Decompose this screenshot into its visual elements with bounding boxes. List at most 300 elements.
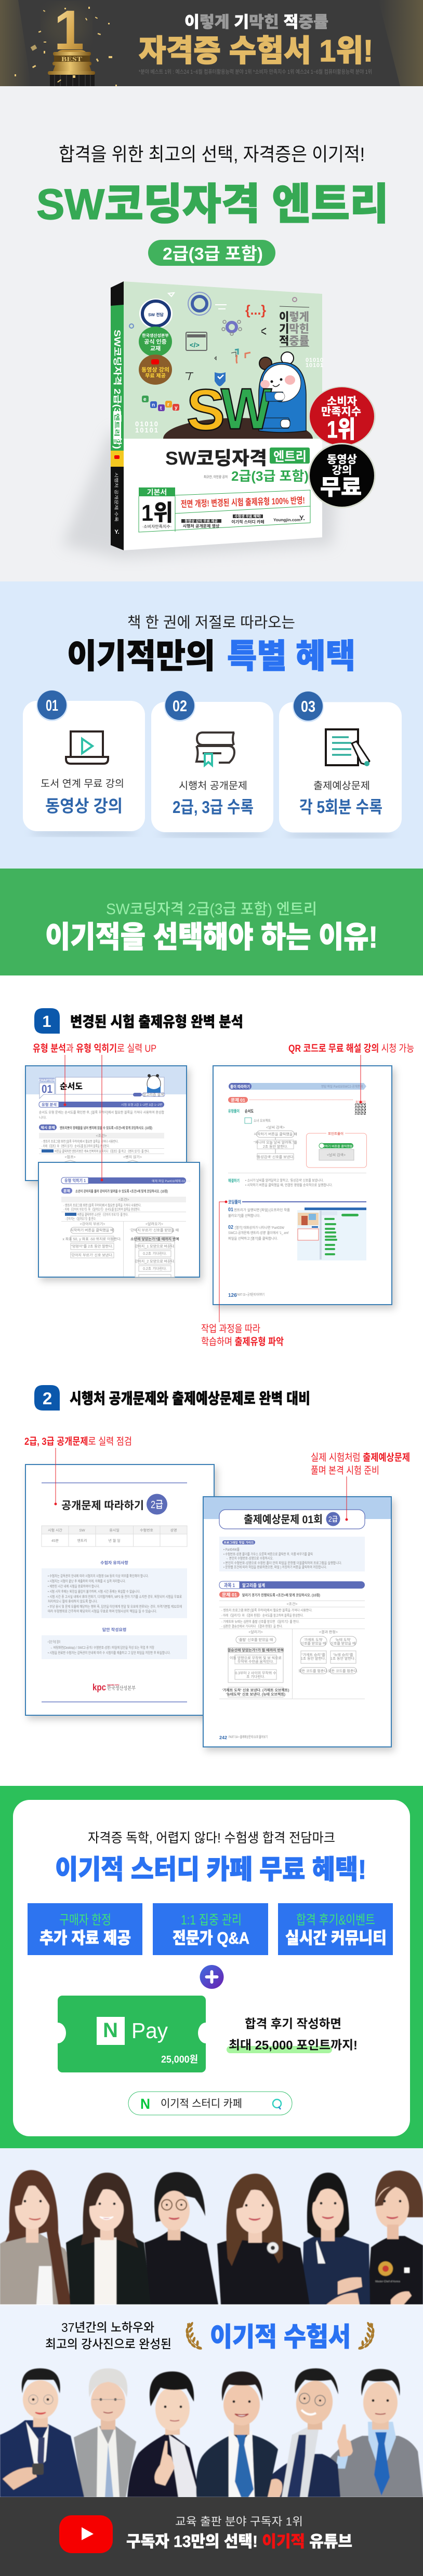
benefit: expert Q&A: 1:1 집중 관리 xyxy=(181,1912,242,1928)
sticker: consumer rank: 1위 xyxy=(327,416,355,443)
page sample: solution with QR: 2초 동안 말한다. xyxy=(263,1145,288,1149)
cover icons: t xyxy=(160,405,162,411)
page sample: type practice: '강아지 부르기' 신호를 받았을 때 xyxy=(130,1228,179,1232)
page sample: expected exam 01: '가제트 도착' xyxy=(304,1638,323,1642)
page sample: type practice: 소년에 닿았는가?를 때까지 반복 xyxy=(130,1237,179,1241)
lower instructors background xyxy=(0,2305,423,2497)
intro subtitle: 합격을 위한 최고의 선택, 자격증은 이기적! xyxy=(59,144,365,165)
page sample: type practice: '강아지 부르기' 신호 보낸다. xyxy=(71,1253,113,1257)
cover info box xyxy=(139,487,310,532)
cover info box: 1위 xyxy=(141,500,173,526)
callout: follow workflow xyxy=(201,1323,284,1348)
page sample: type practice: - 엔트리 프로그램 화면 [블록 꾸러미]에서 필요한 블록을 가져다 사용한다. xyxy=(63,1203,141,1208)
why subtitle: SW코딩자격 2급(3급 포함) 엔트리 xyxy=(106,901,317,918)
benefit: expert Q&A xyxy=(153,1903,268,1955)
cover mascot xyxy=(124,352,322,462)
page sample: public exam: → 바탕화면(Desktop) / SWC2-공개 / 수험번호-성명 / 파일에 답안을 작성 또는 작업 후 저장 xyxy=(50,1646,154,1650)
icon: plus xyxy=(200,1965,223,1989)
photo: male instructors xyxy=(0,2368,423,2497)
cafe title: 이기적 스터디 카페 무료 혜택! xyxy=(55,1855,366,1885)
section 1 heading: 변경된 시험 출제유형 완벽 분석 xyxy=(70,1014,243,1031)
panel: special benefits xyxy=(0,581,423,869)
page sample: expected exam 01: 과목 1 xyxy=(224,1582,235,1589)
laurel left xyxy=(186,2322,202,2350)
page sample: type practice: <강아지 부르기> xyxy=(80,1222,105,1226)
sticker: consumer rank xyxy=(308,386,376,446)
benefits subtitle: 책 한 권에 저절로 따라오는 xyxy=(127,614,295,631)
page sample: public exam: 따라 부정행위로 간주하여 해당자의 시험을 무효로 하며 민형사상의 책임을 질 수 있습니다. xyxy=(48,1609,157,1614)
benefit: extra materials: 추가 자료 제공 xyxy=(39,1929,131,1947)
page sample: solution with QR: 순서도 xyxy=(245,1109,254,1114)
page sample: expected exam 01: 2급 xyxy=(328,1515,338,1523)
sticker: consumer rank: 소비자 xyxy=(327,396,357,408)
callout: follow workflow: 학습하며 출제유형 파악 xyxy=(201,1336,284,1348)
page sample: expected exam 01: "가제트 승리"를 xyxy=(301,1653,325,1657)
table: exam info: 응시일 xyxy=(109,1528,120,1533)
search bar xyxy=(128,2092,292,2115)
banner main title: 자격증 수험서 1위! xyxy=(139,34,373,68)
page sample: expected exam 01: - 아래 《달리기》와 《결과 판정》 순서도를 참고하여 블록을 완성한다. xyxy=(221,1614,303,1618)
table: exam info: 수험번호 xyxy=(140,1528,153,1533)
page sample: expected exam 01: 무작위 수만큼 움직인다. xyxy=(237,1660,274,1664)
cover icons: </> xyxy=(190,341,200,349)
search bar: N xyxy=(140,2096,150,2112)
book cover xyxy=(124,281,323,550)
page sample: expected exam 01: 모든 코드를 멈춘다. xyxy=(298,1669,328,1673)
page sample: expected exam 01: 0.3부터 2 사이의 무작위 수 xyxy=(235,1671,276,1675)
top banner xyxy=(0,0,423,86)
page sample: public exam: 수험자 유의사항 xyxy=(100,1561,129,1565)
page sample: expected exam 01: 신호를 받았을 때 xyxy=(301,1642,326,1646)
page sample: chapter opener: 유형 분석 xyxy=(42,1103,57,1107)
page sample: public exam: • 수험자는 감독관의 안내에 따라 시험지의 시험명 SW 등의 이상 여부를 확인해야 합니다. xyxy=(48,1574,149,1578)
instructor 1 xyxy=(0,2170,91,2304)
cafe subtitle: 자격증 독학, 어렵지 않다! 수험생 합격 전담마크 xyxy=(88,1830,335,1846)
page sample: expected exam 01: • 문항별 조건에 따라 작업을 완료하였으면, 파일 ) 저장하기 버튼을 클릭하여 저장합니다. xyxy=(223,1565,327,1569)
sticker: free video xyxy=(308,443,376,508)
cover badges: 공식 인증 xyxy=(144,338,167,345)
why title: 이기적을 선택해야 하는 이유! xyxy=(45,920,378,954)
cover badges: 무료 제공 xyxy=(145,373,166,379)
page sample: solution with QR: 유형풀이 xyxy=(228,1109,240,1114)
callout: type analysis: 유형 분석과 유형 익히기로 실력 UP xyxy=(33,1043,156,1054)
instructor 6: Master Chef of Korea xyxy=(375,2280,400,2283)
icon: laptop play xyxy=(66,731,108,764)
page sample: solution with QR: 엔트리가 실행되면 [파일]-[오프라인 작품 xyxy=(234,1208,290,1212)
cover mascot: W xyxy=(221,376,272,441)
benefits title xyxy=(67,638,355,675)
page sample: type practice: 0.2초 기다린다. xyxy=(143,1267,167,1271)
cover info box: 수험생 무료 혜택! xyxy=(234,514,261,519)
cover title: 엔트리 xyxy=(273,450,307,464)
cover info box: Y. xyxy=(299,514,305,522)
icon: gold trophy xyxy=(15,0,117,86)
icon: document with pencil xyxy=(326,729,369,766)
page sample: public exam: • 시험지는 시험이 끝난 후 제출하여 이에, 이해를 시 실격 처리합니다. xyxy=(48,1579,126,1583)
page sample: expected exam 01: 1초 동안 말한다. xyxy=(331,1657,355,1661)
cover icons: r xyxy=(167,402,169,408)
instructor man 3 xyxy=(127,2371,200,2497)
benefit: extra materials xyxy=(28,1903,142,1955)
card 01: video lecture: 01 xyxy=(46,697,58,714)
card 02: public exam questions xyxy=(151,690,273,837)
instructor man 5 xyxy=(257,2368,340,2497)
book spine: Y. xyxy=(114,529,120,535)
page sample: expected exam 01: PART 04 • 출제예상문제 01회 풀어보기 xyxy=(229,1735,268,1739)
QR code xyxy=(355,1103,366,1115)
page sample: expected exam 01: 출제예상문제 01회 xyxy=(244,1514,323,1526)
banner footnote: *분야 베스트 1위 : 예스24 1~6월 컴퓨터활용능력 분야 1위 *소비자 만족지수 1위 예스24 1~6월 컴퓨터활용능력 분야 1위 xyxy=(139,69,372,75)
cover icons: e xyxy=(143,397,147,402)
instructor 6 xyxy=(367,2171,423,2304)
page sample: expected exam 01: - 엔트리 프로그램 화면 [블록 꾸러미]에서 필요한 블록을 가져다 사용한다. xyxy=(221,1608,312,1612)
cover icons: {...} xyxy=(245,302,266,318)
page sample: solution with QR: "자나야 오늘 날씨 알려줘."를 xyxy=(254,1141,297,1145)
page sample: solution with QR: 시작하기 버튼을 클릭했을 때 xyxy=(254,1132,297,1136)
step badge 1: 1 xyxy=(42,1012,51,1031)
card 03: expected questions: 각 5회분 수록 xyxy=(299,797,382,817)
page sample: expected exam 01: • 본인의 수험번호-성명으로 수정된 폴더 안의 파일을 문항별 더블클릭하여 프로그램을 실행합니다. xyxy=(223,1561,342,1565)
panel: instructors xyxy=(0,2148,423,2497)
instructor man 1 xyxy=(0,2368,84,2497)
icon: book stack xyxy=(196,733,234,765)
page sample: chapter opener: 01 xyxy=(42,1082,52,1095)
table: exam info: 시험 시간 xyxy=(48,1528,62,1533)
cover icons xyxy=(129,292,323,434)
icon: YouTube xyxy=(59,2515,113,2553)
page sample: chapter opener: <조건> xyxy=(96,1134,107,1138)
banner heading: 이렇게 기막힌 적중률 xyxy=(184,13,328,31)
cover badges: SW 전담 xyxy=(148,313,164,317)
page sample: expected exam 01: 프로그래밍 작업 가이드 xyxy=(223,1541,254,1545)
page sample: chapter opener: 버튼을 클릭하면 엔트리봇은 계속 반복하여 움직이다 《점프》를 하고 《벤치 앉기》를 한다. xyxy=(55,1149,150,1154)
sticker: free video: 무료 xyxy=(320,475,362,499)
section 2 heading: 시행처 공개문제와 출제예상문제로 완벽 대비 xyxy=(70,1390,310,1407)
callout: expected exam: 실제 시험처럼 출제예상문제 xyxy=(311,1452,410,1463)
card 01: video lecture: 도서 연계 무료 강의 xyxy=(41,778,124,790)
page sample: expected exam 01: '출발' 신호를 받았을 때 xyxy=(239,1638,273,1642)
instructors caption xyxy=(45,2321,171,2352)
instructor man 6 xyxy=(322,2369,423,2497)
page sample: chapter opener: - 엔트리 프로그램 화면 [블록 꾸러미]에서 필요한 블록을 가져다 사용한다. xyxy=(42,1140,118,1144)
instructor man 4 xyxy=(196,2371,278,2497)
page sample: chapter opener: 순서도 xyxy=(60,1082,83,1091)
page sample: solution with QR: 포인트풀이 xyxy=(328,1132,343,1136)
page sample: public exam: • 제한된 시간 내에 시험을 완료하여야 합니다. xyxy=(48,1584,100,1589)
page sample: public exam: • 시험을 완료한 수험자는 감독관의 안내에 따라 수 시험지를 제출하고 그 답안 파일을 저장한 후 퇴실합니다. xyxy=(48,1651,170,1655)
icon: search xyxy=(273,2099,281,2109)
table: exam info: 성명 xyxy=(170,1528,177,1533)
page sample: solution with QR: 해결하기 xyxy=(228,1178,240,1183)
page sample: solution with QR: 126 xyxy=(228,1293,237,1298)
table: exam info: SW xyxy=(79,1529,85,1533)
page sample: chapter opener: <벤치 앉기> xyxy=(123,1155,142,1159)
page sample: solution with QR: 02 xyxy=(228,1225,233,1230)
card 02: public exam questions: 시행처 공개문제 xyxy=(179,780,247,792)
page sample: solution with QR: 불러오기]를 선택합니다. xyxy=(228,1214,260,1218)
page sample: expected exam 01: <결과 판정> xyxy=(319,1630,338,1634)
sticker: consumer rank: 만족지수 xyxy=(321,406,361,418)
page sample: expected exam 01: • 수험번호-성명 폴더를 가우스 오른쪽 버튼으로 클릭한 후, 이름 바꾸기를 클릭 xyxy=(223,1552,313,1556)
cover slogan: 이렇게 xyxy=(279,310,309,323)
cover info box: 시행처 공개문제 영상 xyxy=(183,524,220,528)
page sample: type practice: "멍멍이"를 2초 동안 말한다. xyxy=(71,1244,113,1249)
card 02: public exam questions: 02 xyxy=(173,698,187,715)
logo: KPC: kpc xyxy=(92,1682,106,1692)
benefit: live community: 실시간 커뮤니티 xyxy=(285,1929,387,1947)
page sample: solution with QR: 풀이 강의 xyxy=(355,1100,366,1104)
N Pay voucher: N xyxy=(103,2019,118,2042)
page sample: solution with QR: 코딩풀이 xyxy=(228,1199,241,1204)
table: exam info xyxy=(42,1526,187,1547)
page sample: chapter opener: 체시 문제 xyxy=(41,1126,55,1130)
cover info box: ·소비자만족지수· xyxy=(142,524,171,529)
cover badges: 한국생산성본부 xyxy=(142,333,169,338)
cover info box: 전면 개정! 변경된 시험 출제유형 100% 반영! xyxy=(181,496,305,509)
cover title xyxy=(165,448,310,484)
page sample: chapter opener: 엔트리봇이 장애물을 넘어 벤치에 앉을 수 있도록 <조건>에 맞게 코딩하시오. (10점) xyxy=(60,1126,152,1130)
book spine: 시행처 공개문제 수록 xyxy=(114,472,118,522)
instructor 4 xyxy=(217,2174,310,2304)
cover title: SW코딩자격 xyxy=(165,448,267,469)
step badge 2 xyxy=(34,1385,60,1411)
page sample: type practice: <달려오기> xyxy=(146,1222,163,1226)
page sample: chapter opener: 순서도 유형 문제는 순서도를 확인한 후, [블록 꾸러미]에서 필요한 블록을 가져다 사용하여 완성합 xyxy=(39,1110,164,1115)
section 1: exam type analysis xyxy=(25,1008,414,1348)
page sample: public exam: 처리하오니 절대 휴대하지 않도록 합니다. xyxy=(48,1599,98,1604)
page sample: expected exam 01: - 심판은 결승선에서 기다리다 《결과 판정》을 한다. xyxy=(221,1624,283,1629)
page sample: public exam: • 시험 시작 후에는 퇴장실 출입이 불가하며, 시험 시간 중에는 퇴실할 수 없습니다. xyxy=(48,1590,140,1594)
photo: female instructors xyxy=(0,2170,423,2304)
page sample: solution with QR: PART 03 • 공개문제 따라하기 xyxy=(236,1293,265,1297)
footer subtitle: 교육 출판 분야 구독자 1위 xyxy=(175,2515,303,2528)
page sample: solution with QR: • 소녀가 날씨를 알려달라고 말하고, '동성검색' 신호를 보냅니다. xyxy=(245,1178,324,1183)
page sample: type practice: - 아래 《강아지 부르기》와 《달려오기》 순서도를 참고하여 블록을 완성한다. xyxy=(63,1208,140,1212)
card 01: video lecture: 동영상 강의 xyxy=(45,796,123,816)
product title: SW코딩자격 엔트리 xyxy=(36,180,389,228)
cover icons: y xyxy=(175,405,178,411)
cover title: 2급(3급 포함) xyxy=(231,468,309,484)
page sample: type practice: <조건> xyxy=(118,1198,129,1202)
instructor man 2 xyxy=(74,2368,136,2497)
logo: KPC xyxy=(92,1682,136,1692)
level pill: 2급(3급 포함) xyxy=(163,244,263,263)
page sample: expected exam 01: 모든 코드를 멈춘다. xyxy=(328,1669,358,1673)
cover icons: 10101 xyxy=(306,362,323,369)
benefit: live community: 합격 후기&이벤트 xyxy=(296,1912,375,1928)
cover info box: 동영상 강의 무료 제공 xyxy=(184,519,218,523)
page sample: expected exam 01: '가제트 도착' 신호 보낸다. (가제트 오브젝트) xyxy=(222,1688,289,1692)
sticker: free video: 강의 xyxy=(332,465,352,477)
page sample: expected exam 01: 초 기다린다. xyxy=(246,1675,265,1679)
panel: why choose banner xyxy=(0,869,423,975)
benefit: live community xyxy=(278,1903,393,1955)
page sample: expected exam 01: 242 xyxy=(219,1735,227,1740)
instructors caption: 최고의 강사진으로 완성된 xyxy=(45,2337,171,2352)
N Pay voucher xyxy=(49,1996,214,2072)
page sample: expected exam 01: 알고리즘 설계 xyxy=(242,1583,265,1588)
benefits title: 이기적만의 xyxy=(67,638,215,675)
page sample: solution with QR: 풀이 따라하기 xyxy=(230,1084,250,1089)
page sample: solution with QR: SWC2-공개문제-엔트리-성명' 폴더에서 '1_.ent' xyxy=(228,1231,289,1235)
N Pay voucher: 25,000원 xyxy=(161,2054,198,2065)
page sample: type practice: 유형 익히기 1 xyxy=(64,1178,86,1183)
cover title: 최규찬, 이민광 공저 xyxy=(204,475,228,479)
page sample: chapter opener xyxy=(25,1066,187,1181)
page sample: solution with QR: • 시작하기 버튼을 클릭했을 때, 연결된 명령들 순차적으로 실행합니다. xyxy=(245,1183,333,1187)
icon: gold trophy: BEST xyxy=(61,55,82,63)
screenshot: entry editor xyxy=(297,1208,366,1260)
page sample: expected exam 01: → 본인의 수험번호-성명으로 수정하시오. xyxy=(226,1556,273,1561)
instructor 5 xyxy=(302,2173,370,2304)
logo: KPC: 한국생산성본부 xyxy=(107,1685,136,1691)
page sample: type practice: 시작하기 버튼을 클릭했을 때 xyxy=(70,1228,114,1232)
panel: YouTube footer xyxy=(0,2497,423,2576)
page sample: solution with QR: 01 xyxy=(228,1207,233,1213)
cover info box: 기본서 xyxy=(147,488,167,496)
book spine: 엔트리 xyxy=(113,413,120,437)
page sample: solution with QR xyxy=(213,1066,392,1305)
page sample: chapter opener: 알고리즘 설계 xyxy=(143,1093,164,1097)
page sample: public exam: 공개문제 따라하기 xyxy=(61,1500,144,1512)
cover badges xyxy=(139,299,173,385)
page sample: chapter opener: CHAPTER xyxy=(38,1079,55,1082)
page sample: expected exam 01: 1초 동안 말한다. xyxy=(301,1657,326,1661)
book shadow xyxy=(62,431,338,558)
benefit: expert Q&A: 전문가 Q&A xyxy=(173,1929,249,1947)
page sample: type practice: 버튼을 클릭하면 소년은 《강아지 부르기》를 한다. xyxy=(77,1213,128,1217)
cover icons: 01010 xyxy=(135,420,158,428)
page sample: type practice: 0.2초 기다린다. xyxy=(143,1252,167,1256)
page sample: expected exam 01: 결승선에 닿았는가?가 될 때까지 반복 xyxy=(228,1648,284,1652)
callout: expected exam xyxy=(311,1452,410,1476)
page sample: expected exam 01: 달리기 경기가 진행되도록 <조건>에 맞게 코딩하시오. (10점) xyxy=(242,1593,320,1597)
cover slogan: 적중률 xyxy=(279,334,309,347)
instructor 3 xyxy=(144,2172,218,2304)
page sample: expected exam 01: 신호를 받았을 때 xyxy=(331,1642,355,1646)
icon: gold trophy: 1 xyxy=(54,0,84,61)
search bar: 이기적 스터디 카페 xyxy=(161,2098,242,2110)
table: exam info: 엔트리 xyxy=(77,1539,87,1543)
card 03: expected questions: 출제예상문제 xyxy=(313,780,370,792)
page sample: expected exam 01: 이동 방향으로 무작위 및 보 씩으로 xyxy=(230,1656,282,1660)
arrows: section 2 leader lines xyxy=(54,1448,348,1521)
page sample: type practice: 강아지_1 모양으로 바꾼다. xyxy=(135,1244,175,1249)
book spine xyxy=(111,281,124,550)
card 03: expected questions: 03 xyxy=(301,698,315,715)
page sample: expected exam 01: '뉴테도착' 신호 보낸다. (뉴테 오브젝트) xyxy=(226,1692,285,1697)
table: exam info: 년 월 일 xyxy=(108,1539,121,1543)
cover info box: Youngjin.com xyxy=(273,518,300,522)
page sample: expected exam 01 xyxy=(203,1497,391,1747)
panel: white content background xyxy=(0,975,423,1786)
benefits title: 특별 혜택 xyxy=(227,638,355,675)
book spine: SW코딩자격 2급(3급 포함) xyxy=(112,330,122,449)
page sample: solution with QR: 소녀 오브젝트 xyxy=(254,1119,271,1123)
page sample: public exam: 답안 작성요령 xyxy=(102,1628,126,1632)
page sample: solution with QR: [열기] 대화상자가 나타나면 'Part03W xyxy=(235,1226,284,1230)
page sample: type practice: 문제 xyxy=(63,1189,70,1193)
cover badges: 동영상 강의 xyxy=(141,367,169,373)
page sample: public exam: 2급 xyxy=(151,1499,163,1511)
cover badges: 교재 xyxy=(150,345,161,352)
callout: expected exam: 풀며 본격 시험 준비 xyxy=(311,1465,379,1476)
callout: follow workflow: 작업 과정을 따라 xyxy=(201,1323,260,1335)
page sample: solution with QR: 시작하기 버튼을 클릭했을 때 xyxy=(319,1145,356,1148)
cover slogan xyxy=(279,306,309,347)
page sample: expected exam 01: <달리기> xyxy=(248,1630,263,1634)
page sample: type practice: 소년이 강아지를 불러 강아지가 달려올 수 있도록 <조건>에 맞게 코딩하시오. (10점) xyxy=(75,1189,168,1194)
page sample: type practice: 예제 파일 Part03/예제-02.ent xyxy=(152,1179,191,1183)
panel: book intro xyxy=(0,86,423,581)
section 2: public and expected questions xyxy=(24,1385,410,1747)
cover icons: n xyxy=(152,402,155,408)
cover mascot: S xyxy=(187,377,225,442)
page sample: public exam: • 시험 시간 중 고사실 내에서 휴대 전화기, 디지털카메라, MP3 등 전자 기기를 소지한 경우, 퇴장되어 시험을 무효로 xyxy=(48,1595,182,1599)
card 01: video lecture xyxy=(23,690,145,836)
page sample: public exam: • 부당 응시 및 문제 유출에 해당하는 행위 즉, 답안을 타인에게 전달 및 유포에 연루되는 경우, 자격기본법 제32조에 xyxy=(48,1605,182,1609)
benefit: extra materials: 구매자 한정 xyxy=(59,1912,111,1928)
level pill xyxy=(148,240,275,266)
page sample: public exam xyxy=(25,1465,214,1715)
page sample: chapter opener: - 아래 《점프》와 《벤치 앉기》 순서도를 참고하여 블록을 완성한다. xyxy=(42,1144,110,1148)
page sample: chapter opener: 시험 유형 2급 1~2번 3급 1~2번 xyxy=(121,1103,163,1107)
page sample: type practice: 강아지_2 모양으로 바꾼다. xyxy=(135,1259,175,1264)
points copy: 합격 후기 작성하면 xyxy=(245,2017,341,2031)
page sample: solution with QR: 정답 파일 Part03/SWC2-공개문제 xyxy=(321,1084,363,1089)
instructors caption: 37년간의 노하우와 xyxy=(61,2321,154,2335)
page sample: solution with QR: <날씨 검색> xyxy=(327,1153,346,1157)
card 03: expected questions xyxy=(279,691,402,838)
page sample: chapter opener: <점프> xyxy=(64,1155,76,1159)
page sample: type practice: - 강아지는 《달려오기》를 한다. xyxy=(65,1217,96,1221)
page sample: chapter opener: 니다. xyxy=(39,1116,47,1120)
page sample: solution with QR: <날씨 검색> xyxy=(266,1126,285,1130)
instructor 2 xyxy=(66,2173,152,2304)
page sample: public exam: • 답안 작성 절차 xyxy=(48,1640,60,1644)
card 02: public exam questions: 2급, 3급 수록 xyxy=(173,797,254,817)
sticker: free video: 동영상 xyxy=(327,454,357,466)
cover info box: 이기적 스터디 카페 xyxy=(231,520,265,524)
table: exam info: 45분 xyxy=(51,1539,59,1543)
step badge 1 xyxy=(34,1008,60,1034)
title: Igijeok books: 이기적 수험서 xyxy=(210,2322,351,2352)
page sample: expected exam 01: '뉴테 도착' xyxy=(335,1638,351,1642)
callout: QR lecture: QR 코드로 무료 해설 강의 시청 가능 xyxy=(288,1043,414,1054)
page sample: expected exam 01: <조건> xyxy=(286,1602,298,1606)
cover icons: 10101 xyxy=(135,426,158,434)
cover icons: 01010 xyxy=(306,357,323,363)
panel: study cafe benefits xyxy=(0,1786,423,2148)
points copy xyxy=(227,2017,358,2053)
arrows: callout leader lines xyxy=(63,1055,362,1322)
page sample: solution with QR: 파일을 선택하고 [열기]를 클릭합니다. xyxy=(228,1237,278,1241)
points copy: 최대 25,000 포인트까지! xyxy=(229,2038,358,2053)
page sample: solution with QR: 문제 01 xyxy=(231,1097,245,1103)
N Pay voucher: Pay xyxy=(131,2018,168,2043)
page sample: expected exam 01: - 가제트와 뉴테는 심판의 출발 신호를 받으면 《달리기》를 한다. xyxy=(221,1620,299,1624)
cover slogan: 기막힌 xyxy=(279,322,309,335)
page sample: solution with QR: '동성검색' 신호를 보낸다. xyxy=(257,1155,295,1159)
step badge 2: 2 xyxy=(43,1389,52,1408)
page sample: expected exam 01: "뉴테 승리"를 xyxy=(333,1653,353,1657)
laurel right xyxy=(358,2322,375,2350)
page sample: expected exam 01: • Part04W폴 xyxy=(223,1548,240,1552)
page sample: expected exam 01: 문제 01 xyxy=(222,1592,237,1597)
logo: KPC: SMART KPC xyxy=(107,1684,120,1686)
page sample: type practice: x 좌표 50, y 좌표 -50 위치로 이동한다. xyxy=(62,1237,122,1241)
callout: public exam: 2급, 3급 공개문제로 실력 점검 xyxy=(24,1436,132,1447)
